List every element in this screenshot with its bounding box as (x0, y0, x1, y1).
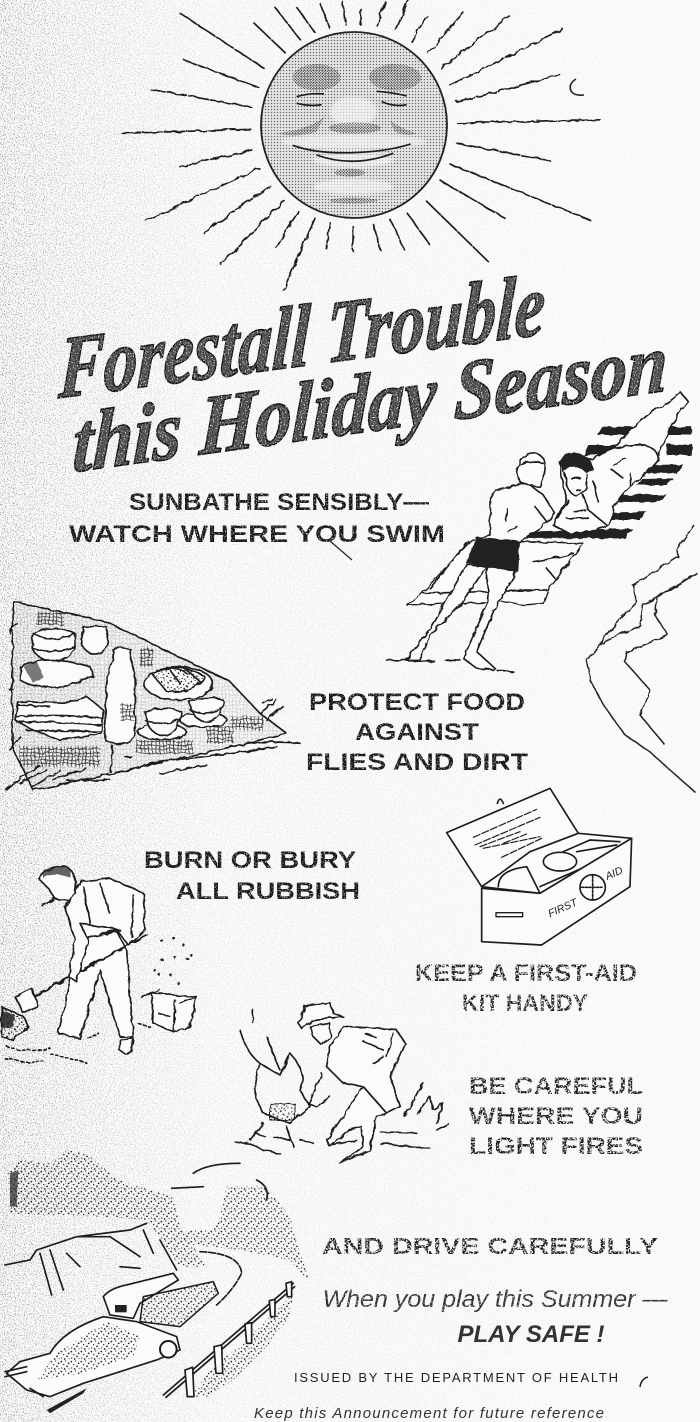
heading: sunbathe: WATCH WHERE YOU SWIM (69, 521, 445, 548)
car (7, 1317, 180, 1397)
rubbish box (152, 993, 197, 1032)
tablecloth edge (7, 623, 300, 790)
arm and shovel (33, 935, 147, 997)
pot (32, 628, 75, 662)
food pile (20, 660, 93, 687)
woman (553, 392, 688, 533)
body (327, 1027, 405, 1113)
heading: first-aid kit: KIT HANDY (462, 990, 588, 1017)
grass (333, 1083, 448, 1148)
heading: protect food: PROTECT FOOD (309, 689, 525, 716)
heading: protect food: AGAINST (355, 719, 479, 746)
illustration: sunbathing couple (386, 392, 693, 672)
saucers and cups (180, 713, 227, 727)
icon: smiling sun (122, 0, 600, 290)
illustration: man digging rubbish (2, 866, 197, 1063)
picnic cloth (12, 602, 287, 790)
box body (482, 838, 632, 945)
kit contents (482, 833, 632, 893)
milk bottle (105, 648, 135, 744)
heading: sunbathe (69, 489, 445, 548)
heading: first-aid kit (415, 960, 637, 1017)
right trees (180, 1187, 310, 1283)
crescent mark (570, 79, 584, 95)
trousers (58, 932, 133, 1038)
heading: drive carefully: AND DRIVE CAREFULLY (322, 1233, 658, 1259)
heading: light fires: WHERE YOU (469, 1103, 643, 1130)
heading: burn or bury: ALL RUBBISH (176, 878, 360, 905)
road edge (200, 1252, 242, 1305)
head and pipe (38, 866, 76, 901)
small stray line (330, 541, 352, 560)
heading: protect food (306, 689, 528, 776)
sun rays (122, 0, 600, 290)
heading: light fires (469, 1073, 643, 1160)
fence (190, 1293, 293, 1397)
illustration: first aid kit: FIRST (546, 896, 581, 920)
jug (82, 627, 108, 654)
sun face (277, 64, 427, 204)
torso (65, 878, 145, 945)
striped towel (407, 427, 693, 605)
slogan: When you play this Summer — (322, 1286, 669, 1313)
heading: burn or bury (144, 847, 360, 905)
slogan (322, 1286, 669, 1348)
title: script heading: Forestall Trouble (56, 256, 547, 418)
slogan: PLAY SAFE ! (458, 1321, 604, 1348)
illustration: first aid kit (447, 788, 632, 945)
hat and head (310, 1023, 330, 1045)
heading: first-aid kit: KEEP A FIRST-AID (415, 960, 637, 987)
salad plate (144, 667, 212, 700)
heading: burn or bury: BURN OR BURY (144, 847, 356, 874)
heading: light fires: BE CAREFUL (469, 1073, 643, 1100)
illustration: car on winding road (5, 1150, 310, 1413)
heading: sunbathe: SUNBATHE SENSIBLY— (129, 489, 429, 516)
disturbed earth (5, 1023, 153, 1063)
shoe (119, 1038, 133, 1054)
cliff lines (5, 1223, 177, 1295)
illustration: picnic food (7, 602, 300, 790)
left trees (8, 1150, 207, 1267)
illustration: first aid kit: AID (603, 864, 625, 883)
issuer line: ISSUED BY THE DEPARTMENT OF HEALTH (294, 1370, 618, 1385)
flames (240, 1010, 310, 1123)
illustration: man lighting fire (235, 1003, 448, 1163)
sandwiches (15, 697, 103, 740)
man (386, 453, 555, 672)
footer note: Keep this Announcement for future reference (254, 1405, 604, 1422)
caravan (103, 1273, 178, 1318)
lid (447, 788, 578, 887)
coastline map lines (587, 525, 697, 792)
sun disc (261, 32, 447, 218)
small mark (640, 1377, 648, 1387)
heading: protect food: FLIES AND DIRT (306, 749, 528, 776)
heading: light fires: LIGHT FIRES (469, 1133, 643, 1160)
